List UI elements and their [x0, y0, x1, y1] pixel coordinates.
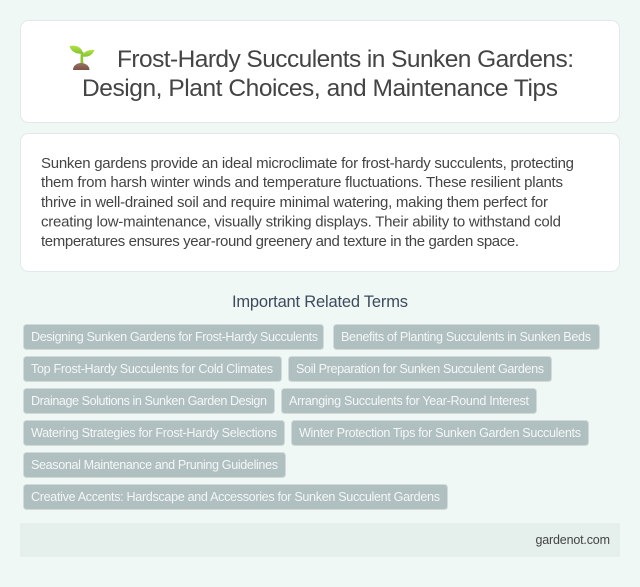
footer bar [20, 523, 620, 557]
text block: introduction: thrive in well-drained soil and require minimal watering, making them perfect for [41, 194, 548, 211]
tag: designing sunken gardens: Designing Sunken Gardens for Frost-Hardy Succulents [31, 330, 318, 344]
tag: winter protection [292, 420, 588, 446]
title [82, 46, 574, 102]
tag: seasonal maintenance [24, 452, 286, 478]
header panel [20, 20, 620, 122]
tag: benefits of planting: Benefits of Planting Succulents in Sunken Beds [341, 330, 591, 344]
tag: benefits of planting [334, 324, 600, 350]
tag: winter protection: Winter Protection Tips for Sunken Garden Succulents [299, 426, 581, 440]
tag: top succulents [24, 356, 282, 382]
tag: seasonal maintenance: Seasonal Maintenance and Pruning Guidelines [31, 458, 278, 472]
tag: creative accents: Creative Accents: Hardscape and Accessories for Sunken Succulent Gardens [31, 490, 440, 504]
tag: drainage solutions: Drainage Solutions in Sunken Garden Design [31, 394, 267, 408]
text block: introduction: temperatures ensures year-round greenery and texture in the garden space. [41, 233, 519, 250]
tag: soil preparation [288, 356, 552, 382]
tag: drainage solutions [24, 388, 274, 414]
tag: arranging succulents [282, 388, 536, 414]
text block: introduction: them from harsh winter winds and temperature fluctuations. These resilient plants [41, 174, 563, 191]
heading: important related terms: Important Related Terms [232, 293, 408, 311]
tag list [24, 324, 600, 510]
tag: watering strategies [24, 420, 284, 446]
tag: watering strategies: Watering Strategies for Frost-Hardy Selections [31, 426, 277, 440]
tag: designing sunken gardens [24, 324, 324, 350]
tag: top succulents: Top Frost-Hardy Succulents for Cold Climates [31, 362, 273, 376]
tag: arranging succulents: Arranging Succulents for Year-Round Interest [289, 394, 530, 408]
text block: introduction [41, 155, 574, 250]
text block: introduction: creating low-maintenance, visually striking displays. Their ability to withstand cold [41, 214, 561, 230]
title: Frost-Hardy Succulents in Sunken Gardens: [117, 46, 574, 73]
tag: soil preparation: Soil Preparation for Sunken Succulent Gardens [296, 362, 544, 376]
icon: sprout [70, 46, 94, 70]
title: Design, Plant Choices, and Maintenance Tips [82, 75, 558, 102]
panel: introduction paragraph [20, 134, 620, 272]
footer text: site name: gardenot.com [536, 533, 610, 547]
text block: introduction: Sunken gardens provide an ideal microclimate for frost-hardy succulents, protecting [41, 155, 574, 172]
tag: creative accents [24, 484, 448, 510]
